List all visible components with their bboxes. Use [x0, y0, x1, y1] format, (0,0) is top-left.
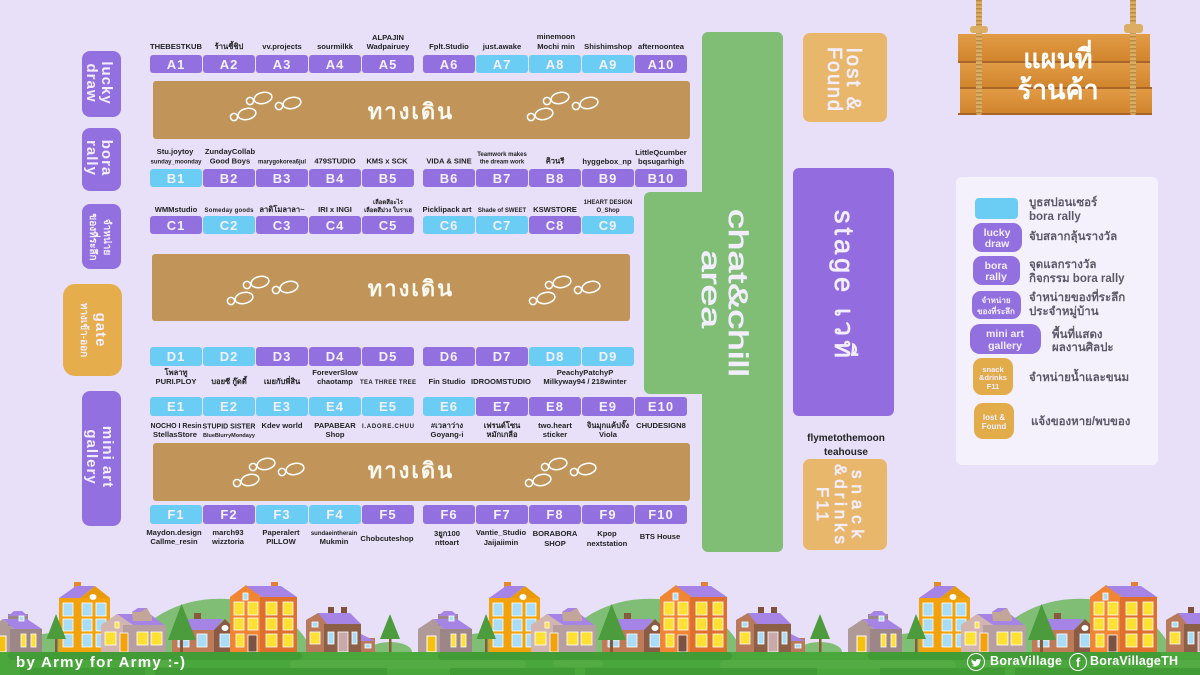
legend: mini art gallery: gallery: [988, 340, 1022, 352]
label: teahouse: flymetothemoon: [807, 433, 885, 444]
row C booths: C6: [440, 218, 458, 233]
row F shop names: Kpop: [597, 529, 617, 538]
legend: mini art gallery: พื้นที่แสดง: [1052, 325, 1103, 341]
row A booths: [150, 55, 687, 73]
row A shop names: ALPAJIN: [372, 33, 404, 42]
row D shop names: เมยกับพี่สิน: [264, 375, 301, 386]
row F booths: F5: [379, 507, 397, 522]
legend: bora rally: bora: [985, 260, 1008, 272]
row F shop names: Callme_resin: [150, 537, 198, 546]
panel: snack and drinks: &drinks: [831, 464, 850, 544]
row B shop names: คิวนรี: [546, 156, 565, 166]
walkway 2: ทางเดิน: [368, 276, 454, 301]
row E booths: E3: [273, 399, 291, 414]
legend: bora rally: กิจกรรม bora rally: [1029, 272, 1125, 285]
row F booths: F7: [493, 507, 511, 522]
panel: lost and found: Found: [823, 47, 845, 111]
row F booths: F8: [546, 507, 564, 522]
legend: sponsor booth: บูธสปอนเซอร์: [1029, 195, 1098, 210]
row F booths: [150, 505, 687, 524]
row B shop names: 479STUDIO: [314, 156, 356, 166]
legend: souvenir: ของที่ระลึก: [977, 305, 1015, 316]
row B shop names: ZundayCollab: [205, 147, 255, 156]
icon: wooden board: [958, 34, 1152, 115]
footer credit: by Army for Army :-): [16, 654, 185, 671]
panel: lucky draw: [82, 51, 121, 117]
panel: mini art gallery: mini art: [99, 426, 116, 488]
row B booths: B5: [379, 171, 397, 186]
row A shop names: sourmilkk: [317, 42, 354, 51]
row C booths: C1: [167, 218, 185, 233]
row E booths: E2: [220, 399, 238, 414]
legend: lost and found: [974, 403, 1131, 439]
legend: snack and drinks: [973, 358, 1129, 395]
row A shop names: Wadpairuey: [367, 42, 410, 51]
row B shop names: KMS x SCK: [366, 156, 408, 166]
panel: chat and chill area: [644, 32, 783, 552]
row F booths: F3: [273, 507, 291, 522]
title text: ร้านค้า: [1017, 75, 1099, 105]
handle: twitter: BoraVillage: [990, 654, 1062, 668]
row B shop names: VIDA & SINE: [426, 156, 472, 166]
row D shop names: ForeverSlow: [312, 368, 358, 377]
panel: chat and chill area: chat&chill: [723, 209, 753, 377]
panel: gate: ทางเข้า-ออก: [78, 303, 90, 357]
row E booths: E7: [493, 399, 511, 414]
panel: mini art gallery: gallery: [83, 429, 100, 485]
row F booths: F9: [599, 507, 617, 522]
legend: lucky draw: lucky: [984, 227, 1011, 239]
row E shop names: จินมุกแค้ปจั๊ง: [586, 419, 629, 431]
row C booths: C8: [546, 218, 564, 233]
row F shop names: BTS House: [640, 532, 680, 541]
panel: stage: stage เวที: [829, 210, 859, 358]
row E shop names: #เวลาว่าง: [431, 421, 463, 430]
panel: mini art gallery: [82, 391, 121, 526]
row E shop names: I.ADORE.CHUU: [362, 424, 414, 430]
row A shop names: THEBESTKUB: [150, 42, 202, 51]
legend: lost and found: แจ้งของหาย/พบของ: [1031, 415, 1131, 428]
row F shop names: Paperalert: [262, 528, 300, 537]
village scenery: [0, 582, 1200, 675]
row C booths: C5: [379, 218, 397, 233]
icon: twitter: [968, 654, 984, 670]
walkway 1: [153, 81, 690, 139]
row A shop names: vv.projects: [262, 42, 302, 51]
legend: souvenir: จำหน่ายของที่ระลึก: [1029, 288, 1125, 304]
row D booths: D1: [167, 349, 185, 364]
legend: lost and found: Found: [982, 422, 1006, 431]
row B shop names: hyggebox_np: [582, 157, 632, 166]
row D booths: D4: [326, 349, 344, 364]
row D shop names: [156, 367, 627, 387]
row C booths: C3: [273, 218, 291, 233]
row E shop names: two.heart: [538, 421, 572, 430]
row A booths: A7: [493, 57, 511, 72]
row C shop names: ลาดิโมลาลา~: [259, 204, 305, 214]
row E shop names: CHUDESIGN8: [636, 421, 686, 430]
legend: lucky draw: [973, 223, 1117, 252]
handle: facebook: BoraVillageTH: [1090, 654, 1178, 668]
row E booths: [150, 397, 687, 416]
legend: souvenir: ประจำหมู่บ้าน: [1029, 304, 1099, 319]
row B booths: B8: [546, 171, 564, 186]
row F booths: F10: [648, 507, 674, 522]
row D booths: D7: [493, 349, 511, 364]
row E shop names: PAPABEAR: [314, 421, 356, 430]
row F shop names: Vantie_Studio: [476, 528, 526, 537]
icon: ropes: [970, 0, 1143, 115]
row C shop names: WMMstudio: [155, 205, 198, 214]
row F shop names: Jaijaiimin: [484, 538, 519, 547]
row A shop names: just.awake: [482, 42, 521, 51]
title text: [1017, 39, 1099, 105]
row C shop names: 1HEART DESIGN: [584, 200, 632, 206]
icon: facebook: f: [1076, 655, 1081, 670]
row D shop names: โพลาทู: [163, 367, 188, 378]
panel: souvenir: จำหน่าย: [101, 219, 113, 255]
row E shop names: BlueBlurryMondayy: [203, 433, 256, 439]
panel: lucky draw: draw: [83, 63, 100, 103]
row F shop names: 3ยูก100: [434, 529, 460, 539]
row B shop names: Stu.joytoy: [157, 147, 194, 156]
title text: แผนที่: [1023, 39, 1093, 74]
row F shop names: nextstation: [587, 539, 628, 548]
row E booths: E4: [326, 399, 344, 414]
row C shop names: Picklipack art: [423, 205, 472, 214]
row E booths: E9: [599, 399, 617, 414]
row F shop names: Chobcuteshop: [360, 534, 414, 543]
row B booths: [150, 169, 687, 187]
row B booths: B9: [599, 171, 617, 186]
row D shop names: IDROOMSTUDIO: [471, 377, 531, 386]
row E shop names: StellasStore: [153, 430, 197, 439]
row E shop names: [151, 419, 686, 439]
row F shop names: wizztoria: [211, 537, 245, 546]
row B shop names: [150, 147, 687, 166]
row A shop names: Fplt.Studio: [429, 42, 469, 51]
row F booths: F6: [440, 507, 458, 522]
legend: souvenir: [972, 288, 1125, 319]
row B shop names: Teamwork makes: [477, 152, 527, 158]
row A shop names: minemoon: [537, 32, 576, 41]
row C shop names: เลือดสีม่วง ใบราเฮ: [364, 206, 412, 214]
panel: snack and drinks: F11: [813, 487, 832, 521]
row E shop names: NOCHO I Resin: [151, 423, 201, 430]
legend: lucky draw: จับสลากลุ้นรางวัล: [1029, 230, 1117, 244]
row B shop names: LittleQcumber: [635, 148, 687, 157]
walkway 1: ทางเดิน: [368, 99, 454, 124]
row C shop names: KSWSTORE: [533, 205, 577, 214]
legend: lost and found: lost &: [983, 413, 1005, 422]
row D booths: D5: [379, 349, 397, 364]
legend: mini art gallery: [970, 324, 1114, 354]
legend: mini art gallery: mini art: [986, 328, 1024, 340]
legend: bora rally: rally: [985, 271, 1007, 283]
row A booths: A4: [326, 57, 344, 72]
panel: bora rally: bora: [98, 140, 115, 176]
row B shop names: Good Boys: [210, 156, 250, 166]
row F shop names: Mukmin: [320, 537, 349, 546]
row A shop names: Mochi min: [537, 42, 575, 51]
row B shop names: sunday_moonday: [150, 160, 202, 166]
row E booths: E10: [648, 399, 674, 414]
row B shop names: marygokorea6jul: [258, 160, 306, 166]
row E shop names: หมักเกลือ: [486, 430, 518, 439]
social handles: [968, 654, 1178, 670]
panel: lost and found: [803, 33, 887, 122]
row D shop names: Fin Studio: [428, 377, 466, 386]
panel: chat and chill area: area: [696, 250, 726, 329]
row E shop names: STUPID SISTER: [203, 424, 255, 430]
legend panel: [956, 177, 1158, 465]
row E booths: E6: [440, 399, 458, 414]
label: teahouse: teahouse: [824, 447, 868, 458]
row C shop names: Someday goods: [204, 208, 254, 214]
icon: facebook: [1070, 654, 1086, 670]
row F shop names: PILLOW: [266, 537, 297, 546]
row A booths: A6: [440, 57, 458, 72]
row B booths: B2: [220, 171, 238, 186]
panel: stage: [793, 168, 894, 416]
row A booths: A3: [273, 57, 291, 72]
row B shop names: the dream work: [480, 160, 525, 166]
row D shop names: Milkyway94 / 218winter: [543, 377, 627, 386]
row F shop names: BORABORA: [533, 529, 578, 538]
row B shop names: bqsugarhigh: [638, 157, 684, 166]
row B booths: B4: [326, 171, 344, 186]
row E shop names: Goyang-i: [431, 430, 463, 439]
legend: bora rally: [973, 256, 1125, 285]
row F booths: F1: [167, 507, 185, 522]
row F shop names: Maydon.design: [146, 528, 202, 537]
panel: bora rally: [82, 128, 121, 191]
sign: map title: [958, 0, 1152, 115]
panel: lost and found: lost &: [842, 48, 864, 111]
walkway 3: [153, 443, 690, 501]
row B booths: B6: [440, 171, 458, 186]
row F booths: F2: [220, 507, 238, 522]
row C shop names: [155, 198, 632, 214]
row D booths: D9: [599, 349, 617, 364]
row C booths: C2: [220, 218, 238, 233]
row D booths: D3: [273, 349, 291, 364]
row B booths: B3: [273, 171, 291, 186]
panel: snack and drinks: snack: [848, 470, 867, 538]
legend: snack and drinks: F11: [987, 382, 999, 391]
row A booths: A10: [648, 57, 674, 72]
row A booths: A2: [220, 57, 238, 72]
row C booths: C7: [493, 218, 511, 233]
row C booths: C9: [599, 218, 617, 233]
legend: souvenir: จำหน่าย: [981, 296, 1011, 305]
row B booths: B7: [493, 171, 511, 186]
legend: snack and drinks: จำหน่ายน้ำและขนม: [1029, 368, 1129, 384]
row E shop names: Viola: [599, 430, 618, 439]
row A shop names: afternoontea: [638, 42, 685, 51]
row A booths: A8: [546, 57, 564, 72]
row F booths: F4: [326, 507, 344, 522]
row E booths: E8: [546, 399, 564, 414]
row A shop names: Shishimshop: [584, 42, 632, 51]
row B booths: B10: [648, 171, 674, 186]
row D shop names: PeachyPatchyP: [557, 368, 613, 377]
row C booths: C4: [326, 218, 344, 233]
walkway 2: [152, 254, 630, 321]
row E booths: E1: [167, 399, 185, 414]
walkway 3: ทางเดิน: [368, 458, 454, 483]
row A shop names: [150, 32, 685, 51]
row E shop names: Kdev world: [262, 421, 303, 430]
panel: souvenir: ของที่ระลึก: [87, 213, 101, 261]
legend: mini art gallery: ผลงานศิลปะ: [1052, 341, 1114, 354]
row E shop names: Shop: [326, 430, 345, 439]
row A booths: A9: [599, 57, 617, 72]
row E booths: E5: [379, 399, 397, 414]
row A booths: A1: [167, 57, 185, 72]
row D booths: D2: [220, 349, 238, 364]
legend: sponsor booth: bora rally: [1029, 211, 1081, 223]
row B booths: B1: [167, 171, 185, 186]
row C shop names: เลือดสีอะไร: [373, 198, 404, 206]
row C booths: [150, 216, 634, 234]
row D booths: [150, 347, 634, 366]
legend: sponsor booth: [975, 195, 1098, 223]
row F shop names: sundaeintherain: [311, 531, 358, 537]
row E shop names: เฟรนด์โซน: [484, 420, 521, 430]
row D booths: D6: [440, 349, 458, 364]
row C shop names: O_Shop: [596, 208, 620, 214]
row E shop names: sticker: [543, 430, 567, 439]
row D shop names: PURI.PLOY: [156, 377, 196, 386]
row D shop names: บอยซี กู๊ดดี้: [211, 375, 248, 387]
panel: bora rally: rally: [83, 140, 100, 176]
row F shop names: nttoart: [435, 538, 459, 547]
row D shop names: chaotamp: [317, 377, 353, 386]
legend: lucky draw: draw: [985, 238, 1010, 250]
row A booths: A5: [379, 57, 397, 72]
legend: bora rally: จุดแลกรางวัล: [1029, 258, 1096, 272]
row D shop names: TEA THREE TREE: [360, 380, 416, 386]
panel: lucky draw: lucky: [98, 61, 115, 105]
panel: snack and drinks: [803, 459, 887, 550]
label: teahouse: [807, 433, 885, 458]
row C shop names: Shade of SWEET: [478, 208, 526, 214]
panel: gate: gate: [92, 313, 109, 347]
row F shop names: SHOP: [544, 539, 566, 548]
legend: snack and drinks: &drinks: [979, 373, 1007, 382]
row A shop names: ร้านชี้ชิป: [215, 40, 244, 51]
legend: snack and drinks: snack: [982, 365, 1004, 374]
panel: gate: [63, 284, 122, 376]
row D booths: D8: [546, 349, 564, 364]
row F shop names: march93: [212, 528, 244, 537]
row C shop names: IRI x INGI: [318, 205, 352, 214]
row F shop names: [146, 528, 680, 548]
panel: souvenir: [82, 204, 121, 269]
